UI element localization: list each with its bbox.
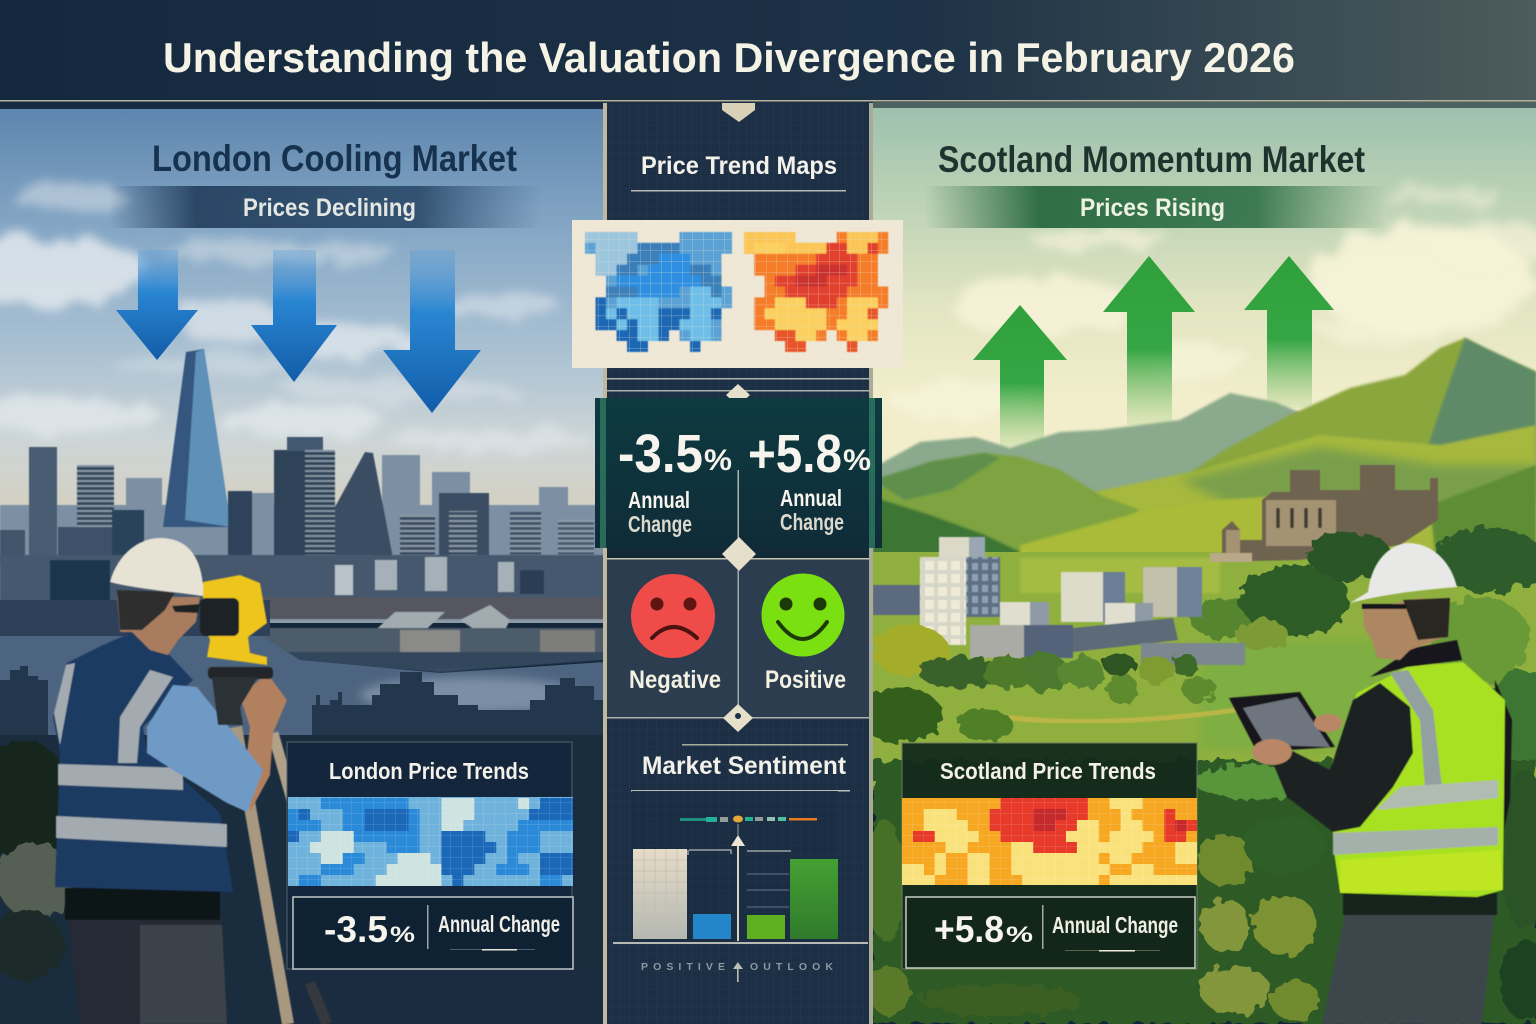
far right hill bbox=[1430, 465, 1536, 600]
belt bbox=[65, 888, 220, 920]
map: Scotland red bbox=[744, 232, 888, 352]
belt bbox=[1343, 893, 1497, 915]
chart guide lines bbox=[747, 874, 789, 907]
head bbox=[117, 597, 200, 655]
stat box: London bbox=[293, 897, 573, 969]
panel: Scotland Price Trends bbox=[902, 743, 1197, 969]
bar: blue bbox=[693, 914, 731, 939]
clouds: Scotland sky bbox=[890, 185, 1536, 418]
stat box: Scotland: Annual Change bbox=[1052, 912, 1178, 938]
meadow bbox=[873, 552, 1536, 790]
background: London cityscape bbox=[0, 103, 605, 1024]
far skyline bbox=[0, 455, 604, 620]
vest stripes bbox=[1333, 670, 1498, 855]
tree belt behind buildings bbox=[1189, 528, 1536, 770]
trousers bbox=[68, 915, 227, 1024]
panel: sentiment faces bbox=[607, 537, 869, 732]
dark tower silhouette bbox=[0, 666, 604, 760]
heading: London Price Trends bbox=[329, 758, 529, 784]
hands bbox=[1252, 739, 1292, 765]
heading: Market Sentiment: Market Sentiment bbox=[642, 752, 847, 780]
head bbox=[1363, 598, 1448, 660]
label: positive outlook bbox=[641, 961, 833, 982]
heat strip: Scotland bbox=[902, 798, 1197, 886]
icon: positive face bbox=[762, 574, 844, 656]
hard hat bbox=[110, 538, 215, 598]
stat: -3.5%: Annual bbox=[628, 487, 690, 513]
theodolite bbox=[200, 575, 273, 725]
label: positive outlook: OUTLOOK bbox=[750, 961, 833, 973]
stat: -3.5%: % bbox=[704, 444, 732, 477]
dark trees left bbox=[0, 740, 73, 980]
foreground foliage bbox=[858, 687, 1536, 1024]
vest bbox=[53, 632, 233, 892]
stat: +5.8%: Annual bbox=[780, 485, 842, 511]
stat: +5.8% bbox=[748, 424, 871, 535]
surveyor with theodolite bbox=[53, 538, 327, 1024]
chart: market sentiment bars bbox=[613, 791, 868, 944]
clouds: London sky bbox=[0, 187, 590, 450]
yellow slopes bbox=[1020, 495, 1300, 560]
stat: +5.8%: % bbox=[843, 444, 871, 477]
dark hill left bbox=[873, 497, 1020, 565]
panel: annual change stats bbox=[595, 398, 882, 559]
hard hat bbox=[1350, 543, 1457, 603]
bridge and wharf bbox=[260, 597, 604, 672]
bar: dark green bbox=[790, 859, 838, 939]
banner: Prices Rising: Prices Rising bbox=[1080, 194, 1225, 222]
stat box: London: -3.5 bbox=[324, 909, 388, 950]
stat box: Scotland: +5.8 bbox=[934, 909, 1004, 950]
map: London blue bbox=[585, 232, 732, 352]
heading: London Cooling Market: London Cooling Market bbox=[152, 138, 517, 179]
heading: Scotland Momentum Market bbox=[925, 139, 1385, 228]
trousers bbox=[1322, 905, 1495, 1024]
heading: London Cooling Market bbox=[110, 138, 540, 228]
heading: Scotland Momentum Market: Scotland Momentum Market bbox=[938, 139, 1365, 180]
near hill bbox=[873, 453, 1140, 560]
castle bbox=[1210, 465, 1438, 562]
centre arrow bbox=[731, 824, 745, 941]
heading: Price Trend Maps: Price Trend Maps bbox=[641, 152, 837, 180]
stat box: Scotland: % bbox=[1006, 922, 1033, 947]
mountain shadow bbox=[1420, 338, 1536, 500]
stat box: Scotland bbox=[906, 897, 1195, 968]
label: positive outlook: POSITIVE bbox=[641, 961, 725, 973]
card: price trend maps bbox=[572, 220, 903, 368]
vest stripes bbox=[54, 663, 227, 847]
collar bbox=[1370, 640, 1462, 677]
bar: white bbox=[633, 849, 687, 939]
bar: light green bbox=[747, 915, 785, 939]
skyline towers bbox=[0, 349, 594, 580]
title: Understanding the Valuation Divergence in February 2026 bbox=[163, 34, 1295, 81]
up arrows bbox=[973, 256, 1334, 447]
stat: -3.5%: -3.5 bbox=[618, 424, 703, 484]
panel: central column bbox=[603, 103, 873, 1024]
trees: mid belt bbox=[872, 624, 1197, 692]
stat: -3.5%: Change bbox=[628, 511, 692, 537]
hi-vis vest bbox=[1332, 662, 1505, 897]
construction worker with tablet bbox=[1229, 543, 1512, 1024]
meadow path bbox=[990, 700, 1300, 721]
top rules bbox=[688, 850, 791, 855]
panel: London Price Trends bbox=[287, 742, 573, 969]
left bank bbox=[0, 600, 270, 636]
down arrows bbox=[116, 250, 481, 413]
sentiment indicator strip bbox=[680, 816, 817, 822]
lower ground bbox=[0, 735, 604, 1024]
divider rules with diamond bbox=[606, 378, 870, 406]
right ridge bbox=[1080, 425, 1536, 560]
forearm bbox=[240, 673, 287, 812]
back edge of jacket bbox=[1495, 680, 1512, 860]
sleeve bbox=[147, 685, 263, 812]
heat strip: London bbox=[288, 797, 573, 886]
tablet bbox=[1229, 692, 1335, 752]
river bbox=[0, 636, 604, 740]
far mountain range bbox=[873, 393, 1536, 560]
icon: negative face bbox=[631, 574, 715, 658]
banner: Prices Declining: Prices Declining bbox=[243, 194, 416, 222]
top notch bbox=[722, 103, 755, 122]
label: Positive: Positive bbox=[765, 666, 846, 694]
background: Scotland landscape bbox=[858, 103, 1536, 1024]
banner: Prices Declining bbox=[110, 186, 540, 228]
stat: -3.5% bbox=[618, 424, 732, 537]
ground below panel bbox=[285, 968, 605, 1024]
heading: Scotland Price Trends bbox=[940, 758, 1156, 784]
stat box: London: Annual Change bbox=[438, 911, 560, 937]
card grid bbox=[572, 220, 903, 368]
title bar bbox=[0, 0, 1536, 109]
tripod bbox=[236, 727, 327, 1024]
modern buildings bbox=[873, 537, 1245, 665]
stat: +5.8%: +5.8 bbox=[748, 424, 842, 484]
sleeve bbox=[1273, 683, 1413, 832]
stat box: London: % bbox=[390, 922, 415, 947]
stat: +5.8%: Change bbox=[780, 509, 844, 535]
label: Negative: Negative bbox=[629, 666, 721, 694]
banner: Prices Rising bbox=[925, 186, 1385, 228]
low waterfront buildings bbox=[0, 555, 604, 610]
standalone meadow trees bbox=[1107, 675, 1216, 705]
main mountain bbox=[1160, 338, 1536, 560]
